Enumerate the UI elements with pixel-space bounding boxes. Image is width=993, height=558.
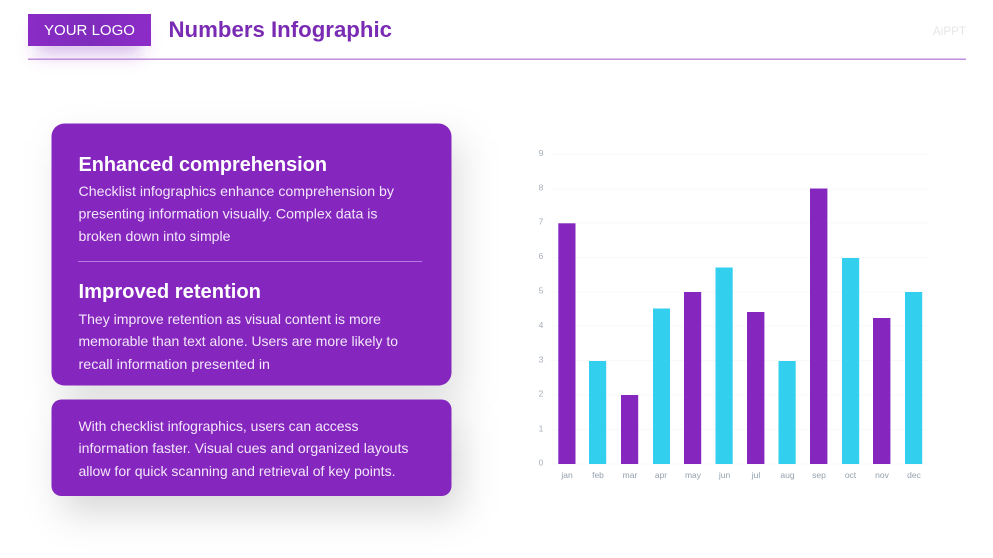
x axis labels: may [685,470,702,480]
text: enhanced comprehension body: presenting information visually. Complex data is [78,206,378,222]
x axis labels: nov [875,470,890,480]
text: improved retention body: They improve retention as visual content is more [78,311,381,327]
bar chart [539,148,928,480]
y axis labels: 9 [539,148,544,158]
brand mark: AiPPT [933,24,967,38]
y axis labels: 6 [539,251,544,261]
y axis labels: 7 [539,216,544,226]
x axis labels: oct [845,470,857,480]
logo: YOUR LOGO [44,22,135,39]
text: improved retention body: memorable than text alone. Users are more likely to [78,333,398,349]
text: faster access body: With checklist infographics, users can access [78,418,358,434]
y axis labels: 1 [539,424,544,434]
x axis labels: jun [718,470,730,480]
x axis labels: aug [780,470,795,480]
x axis labels: mar [623,470,637,480]
panel: faster access [52,400,452,496]
logo [28,14,151,46]
x axis labels: dec [907,470,922,480]
x axis labels: feb [592,470,604,480]
y axis labels: 8 [539,182,544,192]
text: faster access body: allow for quick scanning and retrieval of key points. [78,463,396,479]
text: improved retention body [78,311,398,372]
header rule [28,58,966,60]
text: enhanced comprehension body: broken down into simple [78,228,231,244]
text: improved retention body: recall information presented in [78,356,270,372]
x axis labels: apr [655,470,667,480]
y axis labels: 2 [539,388,544,398]
heading: enhanced comprehension: Enhanced comprehension [78,154,327,176]
panel: comprehension and retention [52,124,452,386]
text: enhanced comprehension body: Checklist infographics enhance comprehension by [78,183,394,199]
x axis labels [560,470,922,480]
x axis labels: sep [812,470,826,480]
y axis labels: 3 [539,354,544,364]
heading: improved retention: Improved retention [78,281,261,303]
bars [558,188,922,464]
title: Numbers Infographic [168,17,392,42]
text: enhanced comprehension body [78,183,394,244]
text: faster access body: information faster. Visual cues and organized layouts [78,440,408,456]
x axis labels: jul [751,470,760,480]
y axis labels: 5 [539,286,544,296]
y axis labels [539,148,544,468]
y axis labels: 4 [539,320,544,330]
x axis labels: jan [560,470,573,480]
y axis labels: 0 [539,458,544,468]
header [28,14,967,60]
text: faster access body [78,418,408,479]
